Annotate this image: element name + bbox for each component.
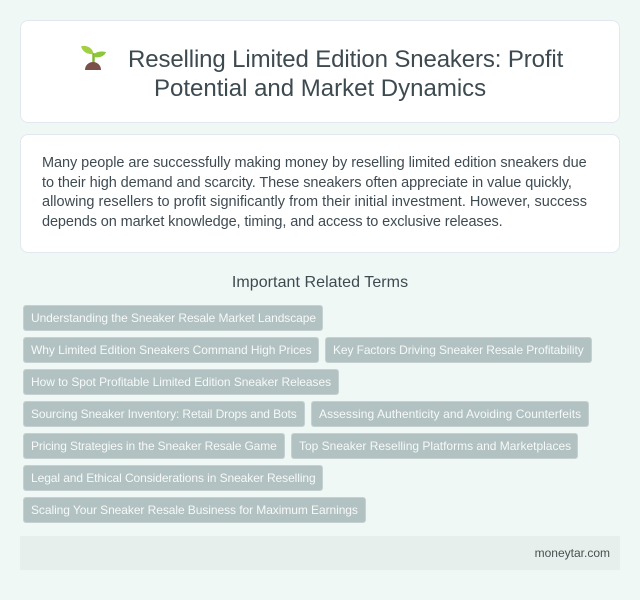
footer source: moneytar.com (535, 546, 610, 560)
description text: Many people are successfully making money by reselling limited edition sneakers due (42, 155, 587, 171)
tag: Top Sneaker Reselling Platforms and Marketplaces (299, 439, 571, 453)
tag: Why Limited Edition Sneakers Command High Prices (31, 343, 312, 357)
tag: Key Factors Driving Sneaker Resale Profitability (333, 343, 584, 357)
panel: title card (20, 20, 620, 123)
description text: allowing resellers to profit significantly from their initial investment. However, success (42, 194, 587, 210)
tag (23, 401, 305, 427)
tag (311, 401, 589, 427)
panel: related term tags (23, 305, 592, 523)
tag: How to Spot Profitable Limited Edition Sneaker Releases (31, 375, 331, 389)
tag (23, 305, 323, 331)
tag: Scaling Your Sneaker Resale Business for Maximum Earnings (31, 503, 358, 517)
tag: Pricing Strategies in the Sneaker Resale Game (31, 439, 277, 453)
tag: Legal and Ethical Considerations in Sneaker Reselling (31, 471, 316, 485)
title (128, 46, 564, 102)
tag (23, 465, 323, 491)
tag (23, 369, 339, 395)
tag: Understanding the Sneaker Resale Market Landscape (31, 311, 316, 325)
panel: description (20, 134, 620, 253)
tag (23, 337, 319, 363)
tag: Sourcing Sneaker Inventory: Retail Drops and Bots (31, 407, 297, 421)
tag: Assessing Authenticity and Avoiding Counterfeits (319, 407, 581, 421)
icon: seedling (81, 46, 106, 70)
tag (23, 433, 285, 459)
tag (23, 497, 366, 523)
description text (42, 155, 587, 230)
title: Potential and Market Dynamics (154, 75, 486, 102)
footer bar (20, 536, 620, 570)
description text: depends on market knowledge, timing, and access to exclusive releases. (42, 214, 503, 230)
tag (291, 433, 578, 459)
tag (325, 337, 592, 363)
heading: related terms: Important Related Terms (232, 274, 408, 291)
description text: to their high demand and scarcity. These sneakers often appreciate in value quickly, (42, 174, 572, 190)
title: Reselling Limited Edition Sneakers: Profit (128, 46, 563, 73)
